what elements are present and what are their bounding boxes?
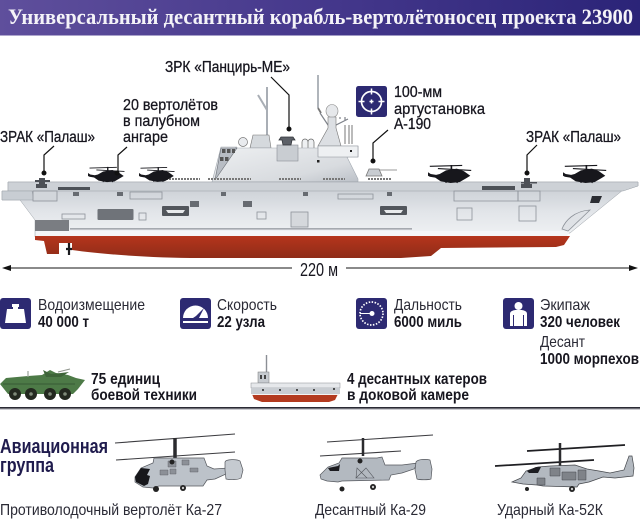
ship illustration bbox=[2, 75, 638, 258]
deck guns Palash bbox=[35, 178, 537, 188]
callout: A-190: артустановка bbox=[394, 101, 485, 118]
caption: Ka-27: Противолодочный вертолёт Ка-27 bbox=[0, 502, 222, 519]
hull details bbox=[33, 191, 540, 227]
callout: 20 helicopters: в палубном bbox=[123, 113, 200, 130]
callout: A-190: А-190 bbox=[394, 116, 431, 133]
callout: Pantsir bbox=[165, 59, 292, 132]
caption: Ka-29: Десантный Ка-29 bbox=[315, 502, 426, 519]
icon: weight bbox=[0, 298, 31, 329]
icon: BTR armored vehicle bbox=[0, 369, 85, 400]
icon: gauge bbox=[180, 298, 211, 329]
callout: Palash stern bbox=[0, 129, 95, 176]
stat: range bbox=[356, 297, 462, 331]
red underwater hull bbox=[35, 236, 570, 258]
stat: crew: 320 человек bbox=[540, 314, 621, 331]
propeller bbox=[66, 243, 72, 255]
caption: Ka-52K: Ударный Ка-52К bbox=[497, 502, 604, 519]
flight deck bbox=[8, 182, 638, 191]
stern block bbox=[35, 220, 69, 231]
length dimension arrow: 220 м bbox=[300, 260, 338, 280]
heading: aviation group bbox=[0, 436, 108, 477]
stat: speed bbox=[180, 297, 277, 331]
armored vehicle with caption: 75 единиц bbox=[91, 371, 160, 388]
icon: person bbox=[503, 298, 534, 329]
icon: landing craft bbox=[251, 355, 340, 402]
callout: Palash bow bbox=[524, 129, 621, 176]
helicopter: Ka-29 bbox=[320, 435, 433, 492]
landing craft with caption: в доковой камере bbox=[347, 387, 469, 404]
callout: A-190 bbox=[356, 84, 485, 164]
landing craft with caption: 4 десантных катеров bbox=[347, 371, 487, 388]
stat: crew bbox=[503, 297, 639, 368]
callout: A-190: 100-мм bbox=[394, 84, 442, 101]
ship superstructure bbox=[166, 75, 397, 182]
callout: Palash stern: ЗРАК «Палаш» bbox=[0, 129, 95, 146]
stat: displacement bbox=[0, 297, 145, 331]
armored vehicle with caption: боевой техники bbox=[91, 387, 197, 404]
helicopter: Ka-27 bbox=[115, 434, 243, 492]
title banner bbox=[0, 0, 640, 36]
armored vehicle with caption bbox=[0, 369, 197, 404]
length dimension arrow bbox=[2, 260, 638, 280]
icon: target bbox=[356, 86, 387, 117]
callout: 20 helicopters: 20 вертолётов bbox=[123, 97, 218, 114]
stat: displacement: 40 000 т bbox=[38, 314, 89, 331]
callout: Palash bow: ЗРАК «Палаш» bbox=[526, 129, 621, 146]
icon: dial bbox=[356, 298, 387, 329]
helicopter: Ka-52K bbox=[495, 443, 634, 492]
stat: crew: Экипаж bbox=[540, 297, 590, 314]
landing craft with caption bbox=[251, 355, 487, 404]
callout: 20 helicopters bbox=[114, 97, 218, 176]
stat: range: 6000 миль bbox=[394, 314, 462, 331]
hull grey bbox=[2, 182, 638, 237]
callout: Pantsir: ЗРК «Панцирь-МЕ» bbox=[165, 59, 290, 76]
stat: crew: Десант bbox=[540, 334, 586, 351]
stat: speed: Скорость bbox=[217, 297, 277, 314]
callout: 20 helicopters: ангаре bbox=[123, 129, 168, 146]
heading: aviation group: Авиационная bbox=[0, 436, 108, 458]
heading: aviation group: группа bbox=[0, 455, 55, 477]
stat: range: Дальность bbox=[394, 297, 462, 314]
helicopters on deck bbox=[88, 165, 606, 183]
stat: displacement: Водоизмещение bbox=[38, 297, 145, 314]
stat: speed: 22 узла bbox=[217, 314, 265, 331]
